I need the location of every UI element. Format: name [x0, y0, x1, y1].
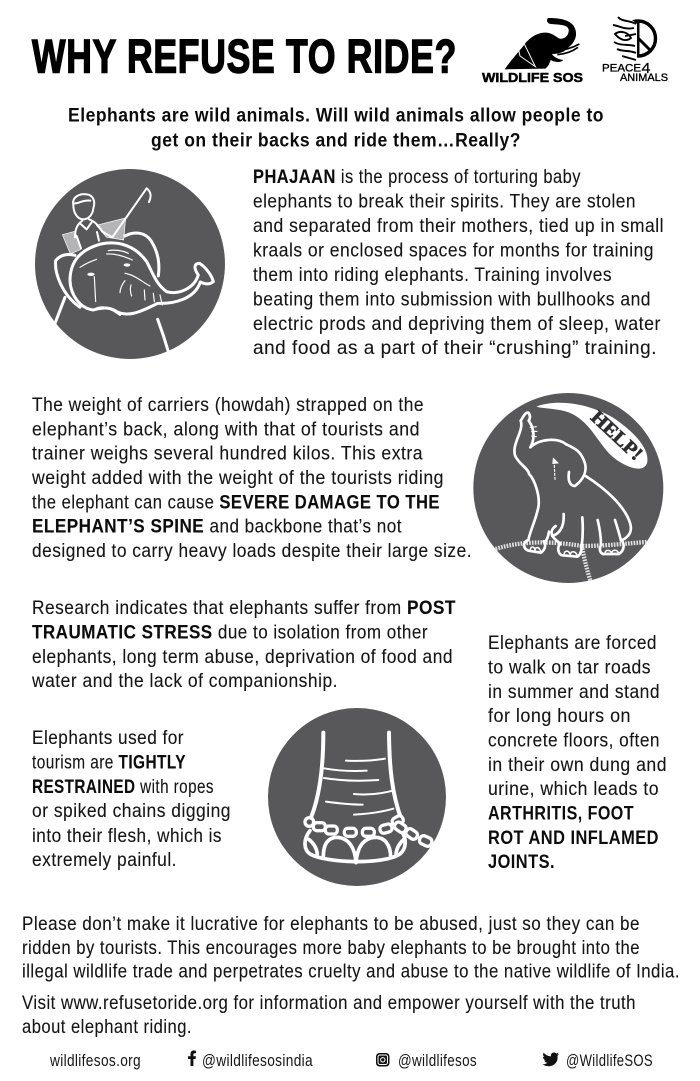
logo: Peace 4 Animals [602, 17, 668, 84]
icon: elephant with rider [35, 169, 225, 359]
text block: weight on spine [31, 395, 472, 562]
rider [73, 194, 112, 248]
toes [305, 831, 405, 863]
logo: Peace 4 Animals: PEACE [602, 62, 641, 74]
text block: arthritis and foot rot: ARTHRITIS, FOOT [488, 804, 634, 824]
text block: Phajaan: beating them into submission with bullhooks and [253, 290, 651, 310]
head and trunk [70, 243, 213, 314]
text block: tightly restrained: extremely painful. [32, 850, 177, 871]
icon: chained elephant foot [268, 708, 446, 886]
text block: tightly restrained [32, 728, 231, 871]
text block: Phajaan: and separated from their mothers, tied up in small [253, 216, 664, 237]
rope [496, 542, 647, 581]
text block: tightly restrained: into their flesh, which is [32, 826, 222, 847]
howdah seat [62, 218, 126, 254]
text block: arthritis and foot rot: to walk on tar roads [488, 658, 651, 678]
text block: post traumatic stress: TRAUMATIC STRESS due to isolation from other [32, 622, 428, 644]
text block: Phajaan: and food as a part of their “crushing” training. [253, 338, 657, 359]
text block: arthritis and foot rot: JOINTS. [488, 852, 555, 873]
footer: twitter: @WildlifeSOS [566, 1052, 653, 1070]
text block: arthritis and foot rot [488, 633, 667, 873]
logo: Peace 4 Animals: 4 [642, 61, 650, 77]
text block: weight on spine: trainer weighs several hundred kilos. This extra [32, 444, 423, 464]
text block: arthritis and foot rot: ROT AND INFLAMED [488, 828, 659, 849]
text block: visit website [22, 993, 636, 1038]
text block: post traumatic stress: elephants, long term abuse, deprivation of food and [32, 647, 453, 668]
text block: Phajaan [253, 167, 664, 359]
text block: closing appeal [22, 914, 680, 982]
text block: Phajaan: PHAJAAN is the process of torturing baby [253, 167, 581, 188]
footer: twitter [542, 1052, 653, 1070]
text block: tightly restrained: Elephants used for [32, 728, 184, 749]
text block: post traumatic stress: Research indicates that elephants suffer from POST [32, 598, 456, 619]
text block: tightly restrained: RESTRAINED with ropes [32, 777, 214, 798]
speech bubble [536, 403, 647, 469]
title: WHY REFUSE TO RIDE? [32, 30, 457, 84]
subtitle: Elephants are wild animals. Will wild animals allow people to [68, 106, 604, 126]
text block: Phajaan: electric prods and depriving them of sleep, water [253, 314, 661, 335]
body [55, 297, 168, 352]
text block: weight on spine: elephant’s back, along with that of tourists and [32, 420, 420, 440]
text block: Phajaan: elephants to break their spirits. They are stolen [253, 192, 636, 212]
tear and wrinkles [552, 457, 559, 464]
bubble text: HELP! [586, 407, 646, 465]
face details [80, 250, 162, 305]
subtitle [68, 106, 604, 152]
text block: post traumatic stress: water and the lack of companionship. [31, 671, 338, 692]
text block: Phajaan: kraals or enclosed spaces for months for training [253, 240, 654, 262]
text block: arthritis and foot rot: urine, which leads to [488, 779, 659, 800]
text block: tightly restrained: or spiked chains digging [32, 801, 231, 822]
subtitle: get on their backs and ride them…Really? [151, 130, 521, 152]
text block: weight on spine: weight added with the weight of the tourists riding [31, 468, 444, 489]
text block: arthritis and foot rot: in summer and stand [488, 682, 660, 703]
logo: Wildlife SOS [482, 18, 583, 85]
text block: weight on spine: The weight of carriers (howdah) strapped on the [32, 395, 424, 416]
logo: Wildlife SOS: WILDLIFE SOS [482, 70, 583, 85]
icon: elephant calling for help [473, 393, 663, 583]
elephant outline [514, 413, 631, 547]
footer: facebook: @wildlifesosindia [202, 1052, 313, 1070]
text block: post traumatic stress [31, 598, 456, 692]
text block: visit website: about elephant riding. [22, 1017, 192, 1038]
text block: weight on spine: the elephant can cause SEVERE DAMAGE TO THE [32, 492, 440, 514]
text block: arthritis and foot rot: in their own dung and [488, 755, 667, 776]
footer: website: wildlifesos.org [49, 1052, 141, 1070]
footer: instagram [376, 1052, 477, 1070]
chain [305, 815, 433, 848]
text block: weight on spine: ELEPHANT’S SPINE and backbone that’s not [32, 516, 402, 538]
footer: instagram: @wildlifesos [398, 1052, 477, 1070]
feet [524, 540, 624, 557]
wrinkles [324, 759, 393, 815]
bullhook [112, 188, 151, 237]
text block: Phajaan: them into riding elephants. Training involves [253, 265, 612, 286]
leg outline [310, 733, 402, 820]
text block: weight on spine: designed to carry heavy loads despite their large size. [32, 541, 472, 562]
logo: Peace 4 Animals: ANIMALS [620, 72, 668, 84]
text block: arthritis and foot rot: concrete floors, often [488, 730, 660, 752]
text block: arthritis and foot rot: for long hours on [488, 706, 631, 727]
text block: closing appeal: Please don’t make it lucrative for elephants to be abused, just so they can be [22, 914, 640, 935]
ears [56, 233, 159, 307]
text block: tightly restrained: tourism are TIGHTLY [32, 752, 186, 774]
text block: arthritis and foot rot: Elephants are forced [488, 633, 657, 654]
